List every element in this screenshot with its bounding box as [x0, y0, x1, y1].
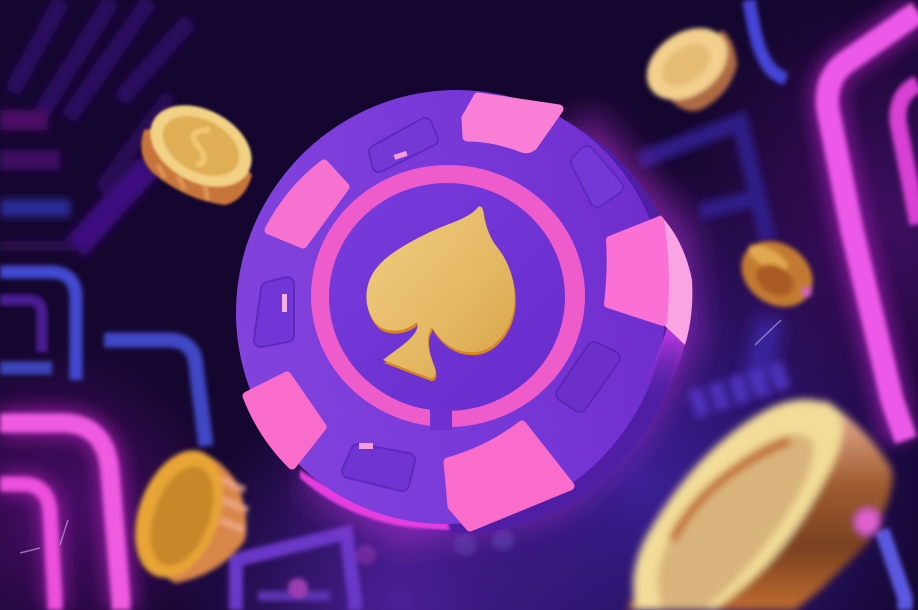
notch: upper right — [578, 153, 616, 200]
segment: bottom — [448, 425, 570, 527]
segment: upper left — [269, 164, 345, 244]
neon tubes: right side — [640, 0, 918, 610]
coin: top left — [136, 89, 266, 205]
chip edge — [166, 14, 766, 610]
neon tubes: left side — [0, 272, 206, 610]
coin face — [633, 399, 842, 610]
pink ring — [311, 165, 585, 427]
chip glow — [300, 110, 700, 545]
chip face — [151, 5, 751, 609]
coin: right — [729, 228, 825, 320]
segment: right, side — [660, 215, 692, 345]
neon panel: bottom centre — [236, 529, 514, 610]
neon tubes: top left — [0, 0, 190, 248]
coin: top right — [633, 13, 741, 115]
segment: lower left — [247, 376, 322, 465]
notch: lower right — [563, 349, 613, 405]
notch: left — [261, 284, 287, 340]
coin: bottom right, large and blurred — [626, 399, 892, 610]
chip edge: magenta highlight under right segment — [640, 328, 685, 402]
coin side — [626, 400, 892, 610]
coin crescent — [672, 440, 790, 540]
segment: right — [608, 220, 665, 322]
icon: gold spade — [366, 206, 516, 381]
notch: bottom — [349, 443, 408, 484]
inner disc — [329, 183, 565, 411]
poker chip — [151, 5, 766, 610]
segment: top — [466, 97, 559, 149]
ring gap — [430, 408, 452, 430]
sparkles — [20, 320, 781, 553]
coin: bottom left — [119, 438, 248, 590]
notch: top — [376, 125, 431, 165]
